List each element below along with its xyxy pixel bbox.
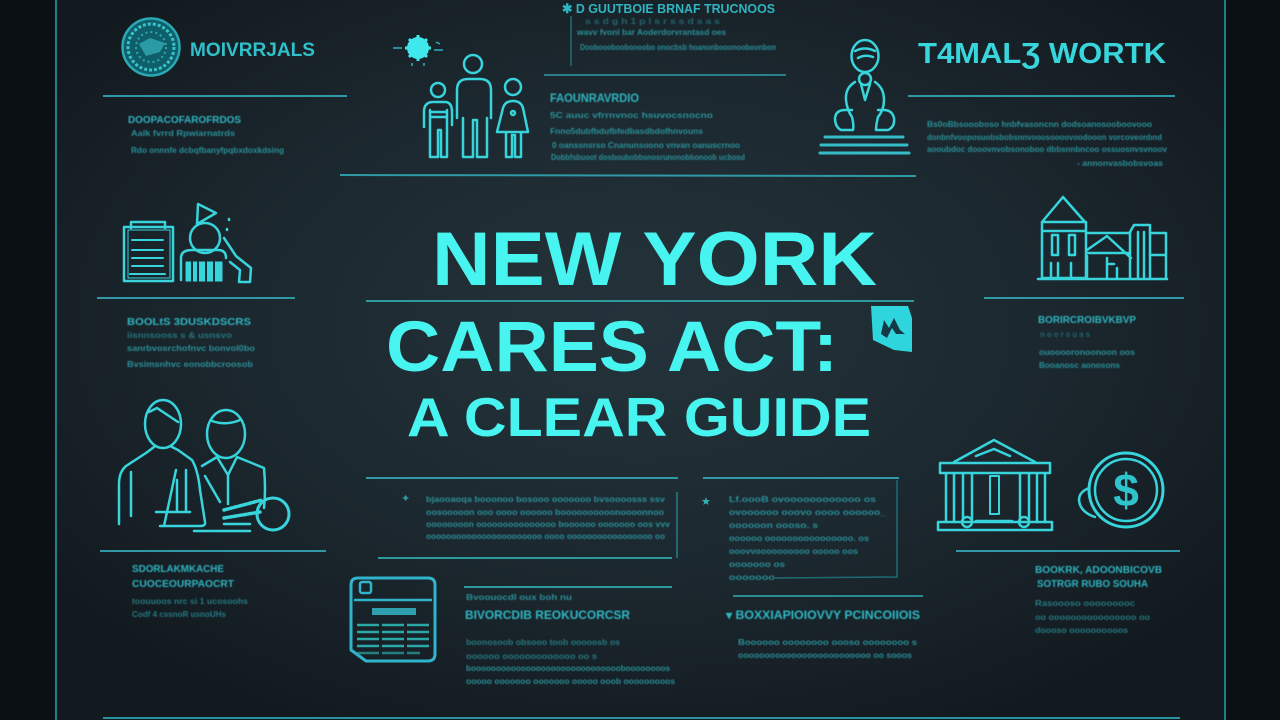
text block: top note: wavv fvonl bar Aoderdorvrantasd oes	[576, 27, 726, 37]
text block: required resources: BIVORCDIB REOKUCORCSR	[465, 608, 630, 622]
heading: top note: ✱ D GUUTBOIE BRNAF TRUCNOOS	[562, 1, 775, 16]
panel: house and property	[984, 197, 1184, 370]
icon: two advisors	[119, 400, 289, 531]
text block: house: Booanosc aonosons	[1039, 360, 1120, 370]
text block: individuals: DOOPACOFAROFRDOS	[128, 114, 241, 126]
text block: benefits right: oooooo oooooooooooooooo. os	[729, 533, 869, 543]
panel: household details: 0 oanssnsrso Cnanunsoono vnvan oanuscrnoo	[552, 140, 740, 150]
text block: funding: SOTRGR RUBO SOUHA	[1037, 578, 1148, 590]
text block: advisors	[132, 563, 248, 619]
heading: individuals: MOIVRRJALS	[190, 40, 315, 61]
text block: benefits right: oooooon oooso. s	[729, 520, 818, 530]
title line 3: A CLEAR GUIDE	[407, 386, 871, 448]
panel: individuals	[103, 18, 347, 155]
text block: required resources: booooooooooooooooooooooooooooooboooooooos	[466, 663, 670, 673]
icon: virus	[393, 35, 443, 66]
icon: clipboard and worker	[124, 204, 251, 282]
heading: responsibilities: ▾ BOXXIAPIOIOVVY PCINCOIIOIS	[725, 610, 920, 622]
icon: state badge	[871, 306, 912, 352]
text block: enrolment: iisnnsooss s & usnsvo	[127, 330, 232, 340]
title line 1: NEW YORK	[432, 217, 877, 302]
text block: advisors: toouuoos nrc si 1 ucosoohs	[132, 596, 248, 606]
text block: responsibilities: ooooooooooooooooooooooooo oo sooos	[738, 650, 912, 660]
panel: advisors	[100, 400, 326, 619]
text block: benefits right: ooovvoooooooooo ooooo oos	[729, 546, 858, 556]
icon: dollar coin: $	[1113, 464, 1139, 516]
text block: individuals: Rdo onnnfe dcbqfbanyfpqbxdoxkdsing	[131, 145, 284, 155]
icon: star bullet: ★	[701, 496, 711, 508]
text block: funding: oo oooooooooooooooo oo	[1035, 612, 1150, 622]
panel: top centre note	[544, 1, 786, 75]
text block: individuals: Aalk fvrrd Rpwiarnatrds	[131, 128, 235, 138]
panel: enrolment	[97, 204, 295, 369]
text block: house	[1038, 314, 1136, 370]
text block: tribal works	[927, 119, 1167, 168]
text block: benefits right: ooooooo	[729, 572, 775, 582]
text block: required resources	[465, 592, 675, 686]
text block: advisors: SDORLAKMKACHE	[132, 563, 224, 575]
text block: top note: Dooboooboobonoobo onocbsb hoanonbooonooboonbon	[580, 42, 776, 52]
panel: household details: FAOUNRAVRDIO	[550, 93, 639, 105]
text block: enrolment: BOOLtS 3DUSKDSCRS	[127, 316, 251, 328]
text block: benefits left: oooooooon ooooooooooooooo boooooo ooooooo oos vvv	[426, 519, 670, 529]
text block: benefits left	[426, 494, 670, 541]
text block: enrolment: sanrbvosrchofnvc bonvol0bo	[127, 343, 255, 353]
text block: benefits right	[729, 494, 886, 582]
icon: seated figure	[820, 40, 909, 153]
heading: tribal works: T4MALƷ WORTK	[918, 38, 1166, 70]
text block: funding: doooso oooooooooos	[1035, 625, 1128, 635]
text block: funding: Rasoooso ooooooooc	[1035, 598, 1135, 608]
panel: household details: Fnno5dubfbdufbfedbasdbdofhnvouns	[550, 126, 703, 136]
text block: house: BORIRCROIBVKBVP	[1038, 314, 1136, 326]
panel: household details: Dobbfsbuoot dosboubobbsnosrunonobbonoob ucbosd	[551, 152, 745, 162]
panel: bank and funding	[938, 440, 1180, 635]
text block: funding	[1035, 564, 1162, 635]
text block: required resources: ooooo ooooooo ooooooo ooooo ooob ooooooooos	[466, 676, 675, 686]
text block: required resources: boonosoob obsooo toob ooooosb os	[466, 637, 620, 647]
text block: required resources: Bvoouocdl oux boh nu	[466, 592, 572, 602]
text block: benefits left: oosooooon ooo oooo oooooo boooooooooonoooonnoo	[426, 507, 664, 517]
icon: document	[351, 578, 435, 661]
icon: seal	[122, 18, 180, 76]
text block: house: ouooooronoonoon oos	[1039, 347, 1135, 357]
panel: benefits box left	[366, 478, 678, 558]
title block	[366, 217, 914, 448]
text block: tribal works: - annonvasbobsvoas	[1077, 158, 1163, 168]
text block: advisors: CUOCEOURPAOCRT	[132, 578, 235, 590]
icon: family	[424, 55, 528, 157]
text block: benefits right: ooooooo os	[729, 559, 785, 569]
icon: dollar coin	[1079, 453, 1163, 527]
text block: top note: s s d g h 1 p l s r s s d s a s	[585, 16, 720, 26]
panel: required resources	[464, 587, 675, 686]
text block: enrolment: Bvsimsnhvc eonobbcroosob	[127, 359, 253, 369]
text block: individuals	[128, 114, 284, 155]
text block: required resources: oooooo ooooooooooooo oo s	[466, 651, 597, 661]
text block: funding: BOOKRK, ADOONBICOVB	[1035, 564, 1162, 576]
panel: household details: 5C auuc vfrrnvnoc hsuvocsnocno	[550, 110, 713, 120]
panel: boxed responsibilities	[725, 596, 923, 660]
title line 2: CARES ACT:	[386, 308, 838, 387]
text block: responsibilities	[738, 637, 917, 660]
icon: houses	[1038, 197, 1167, 279]
icon: bank	[938, 440, 1052, 530]
panel: tribal works	[908, 38, 1175, 168]
panel: benefits box right	[701, 478, 899, 582]
text block: benefits right: ovoooooo ooovo oooo oooooo_	[729, 507, 886, 517]
text block: tribal works: donbnfvooposuobsbobsnnvooosoooovoodooon vorcoveonbnd	[927, 132, 1162, 142]
text block: house: n o o r s u a s	[1040, 329, 1090, 339]
text block: top note	[576, 16, 776, 52]
text block: benefits left: bjaooaoqa booonoo bosooo ooooooo bvsoooosss ssv	[426, 494, 665, 504]
text block: benefits right: Lf.oooB ovoooooooooooo os	[729, 494, 876, 504]
icon: bullet: ✦	[401, 493, 410, 505]
text block: enrolment	[127, 316, 255, 369]
text block: tribal works: Bs0oBbsoooboso hnbfvasoncnn dodsoanosooboovooo	[927, 119, 1152, 129]
text block: responsibilities: Boooooo oooooooo oooso oooooooo s	[738, 637, 917, 647]
text block: benefits left: ooooooooooooooooooooooo oooo ooooooooooooooooo oo	[426, 531, 665, 541]
text block: advisors: Codf 4 cssnoR usnoUHs	[132, 609, 226, 619]
panel: household details	[550, 93, 745, 162]
text block: tribal works: aooubdoc dooovnvobsonoboo dbbsnnbncoo ossuosnvsvnoov	[927, 144, 1167, 154]
